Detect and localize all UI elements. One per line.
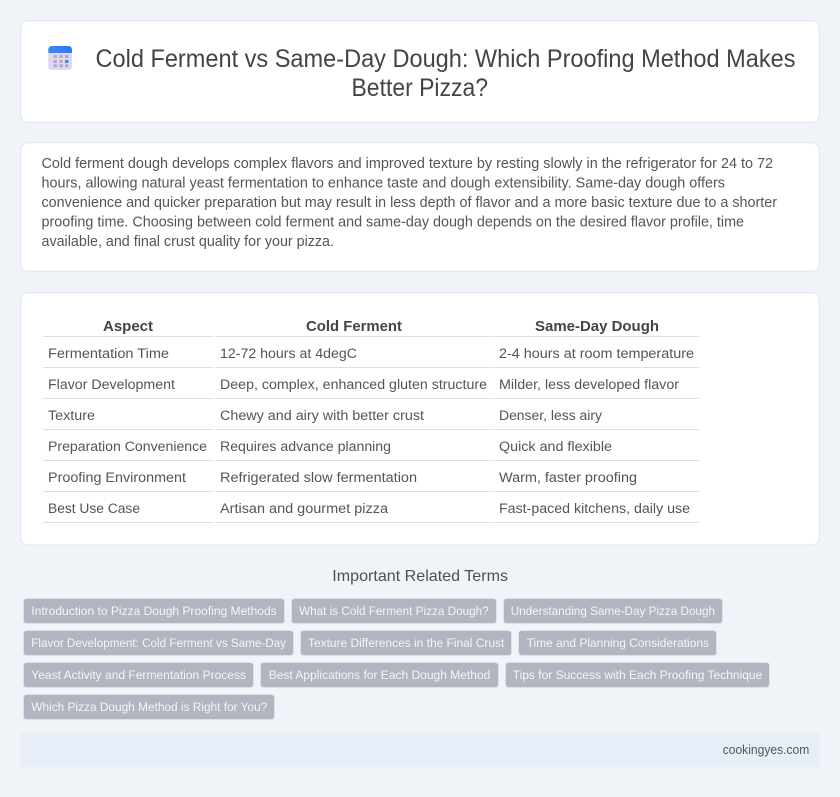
table row: proofing environment: Refrigerated slow fermentation [220,470,417,486]
tag: Which Pizza Dough Method is Right for You? [31,700,268,714]
tag: Flavor Development: Cold Ferment vs Same-Day [31,636,287,650]
table header row: Cold Ferment [306,318,402,335]
title: Better Pizza? [352,74,488,102]
table row: preparation convenience [48,439,612,455]
text block: summary [42,156,777,250]
table row: preparation convenience: Requires advance planning [220,439,391,455]
icon: calendar [48,46,72,70]
table row: fermentation time: Fermentation Time [48,346,169,362]
text block: summary: hours, allowing natural yeast fermentation to enhance taste and dough extensibility. Same-day dough offers [42,175,725,191]
tag [518,630,716,656]
table row: proofing environment [48,470,637,486]
tag: Yeast Activity and Fermentation Process [31,668,246,682]
tag [24,662,254,688]
text block: summary: convenience and quicker preparation but may result in less depth of flavor and a more basic texture due to a shorter [42,195,777,211]
table row: flavor development: Milder, less developed flavor [499,377,679,393]
panel: related term tags [24,598,770,720]
text block: summary: proofing time. Choosing between cold ferment and same-day dough depends on the desired flavor profile, time [42,214,744,230]
table row: texture: Chewy and airy with better crust [220,408,424,424]
tag [506,662,770,688]
table header row: Aspect [103,318,153,335]
table row: fermentation time [48,346,694,362]
table row: proofing environment: Warm, faster proofing [499,470,637,486]
tag [24,630,294,656]
table row: texture: Texture [48,408,95,424]
tag: Texture Differences in the Final Crust [308,636,505,650]
tag: Introduction to Pizza Dough Proofing Methods [31,604,277,618]
footer: cookingyes.com [723,743,809,757]
table row: fermentation time: 12-72 hours at 4degC [220,346,357,362]
text block: summary: available, and final crust quality for your pizza. [42,234,334,250]
table row: flavor development: Flavor Development [48,377,175,393]
table row: flavor development [48,377,679,393]
tag [300,630,512,656]
panel: header [21,21,819,122]
table row: texture [48,408,603,424]
table row: best use case: Best Use Case [48,501,140,517]
title [96,45,796,102]
footer [20,733,820,767]
table header row [103,318,659,335]
panel: comparison table [21,293,819,545]
text block: summary: Cold ferment dough develops complex flavors and improved texture by resting slowly in the refrigerator for 24 to 72 [42,156,773,172]
table row: flavor development: Deep, complex, enhanced gluten structure [220,377,487,393]
table row: preparation convenience: Preparation Convenience [48,439,207,455]
table row: texture: Denser, less airy [499,408,603,424]
heading: important related terms: Important Related Terms [332,568,508,585]
tag: Understanding Same-Day Pizza Dough [511,604,715,618]
table row: best use case: Fast-paced kitchens, daily use [499,501,690,517]
title: Cold Ferment vs Same-Day Dough: Which Proofing Method Makes [96,45,796,73]
table row: best use case [48,501,690,517]
table header row: Same-Day Dough [535,318,659,335]
tag: Time and Planning Considerations [527,636,709,650]
tag [260,662,498,688]
panel: summary paragraph [21,143,819,271]
tag [292,598,496,624]
tag: Tips for Success with Each Proofing Technique [513,668,763,682]
table row: preparation convenience: Quick and flexible [499,439,612,455]
tag: Best Applications for Each Dough Method [269,668,490,682]
table row: proofing environment: Proofing Environment [48,470,186,486]
tag [24,694,274,720]
table row: best use case: Artisan and gourmet pizza [220,501,388,517]
table row: fermentation time: 2-4 hours at room temperature [499,346,694,362]
tag [504,598,722,624]
tag: What is Cold Ferment Pizza Dough? [299,604,489,618]
tag [24,598,284,624]
